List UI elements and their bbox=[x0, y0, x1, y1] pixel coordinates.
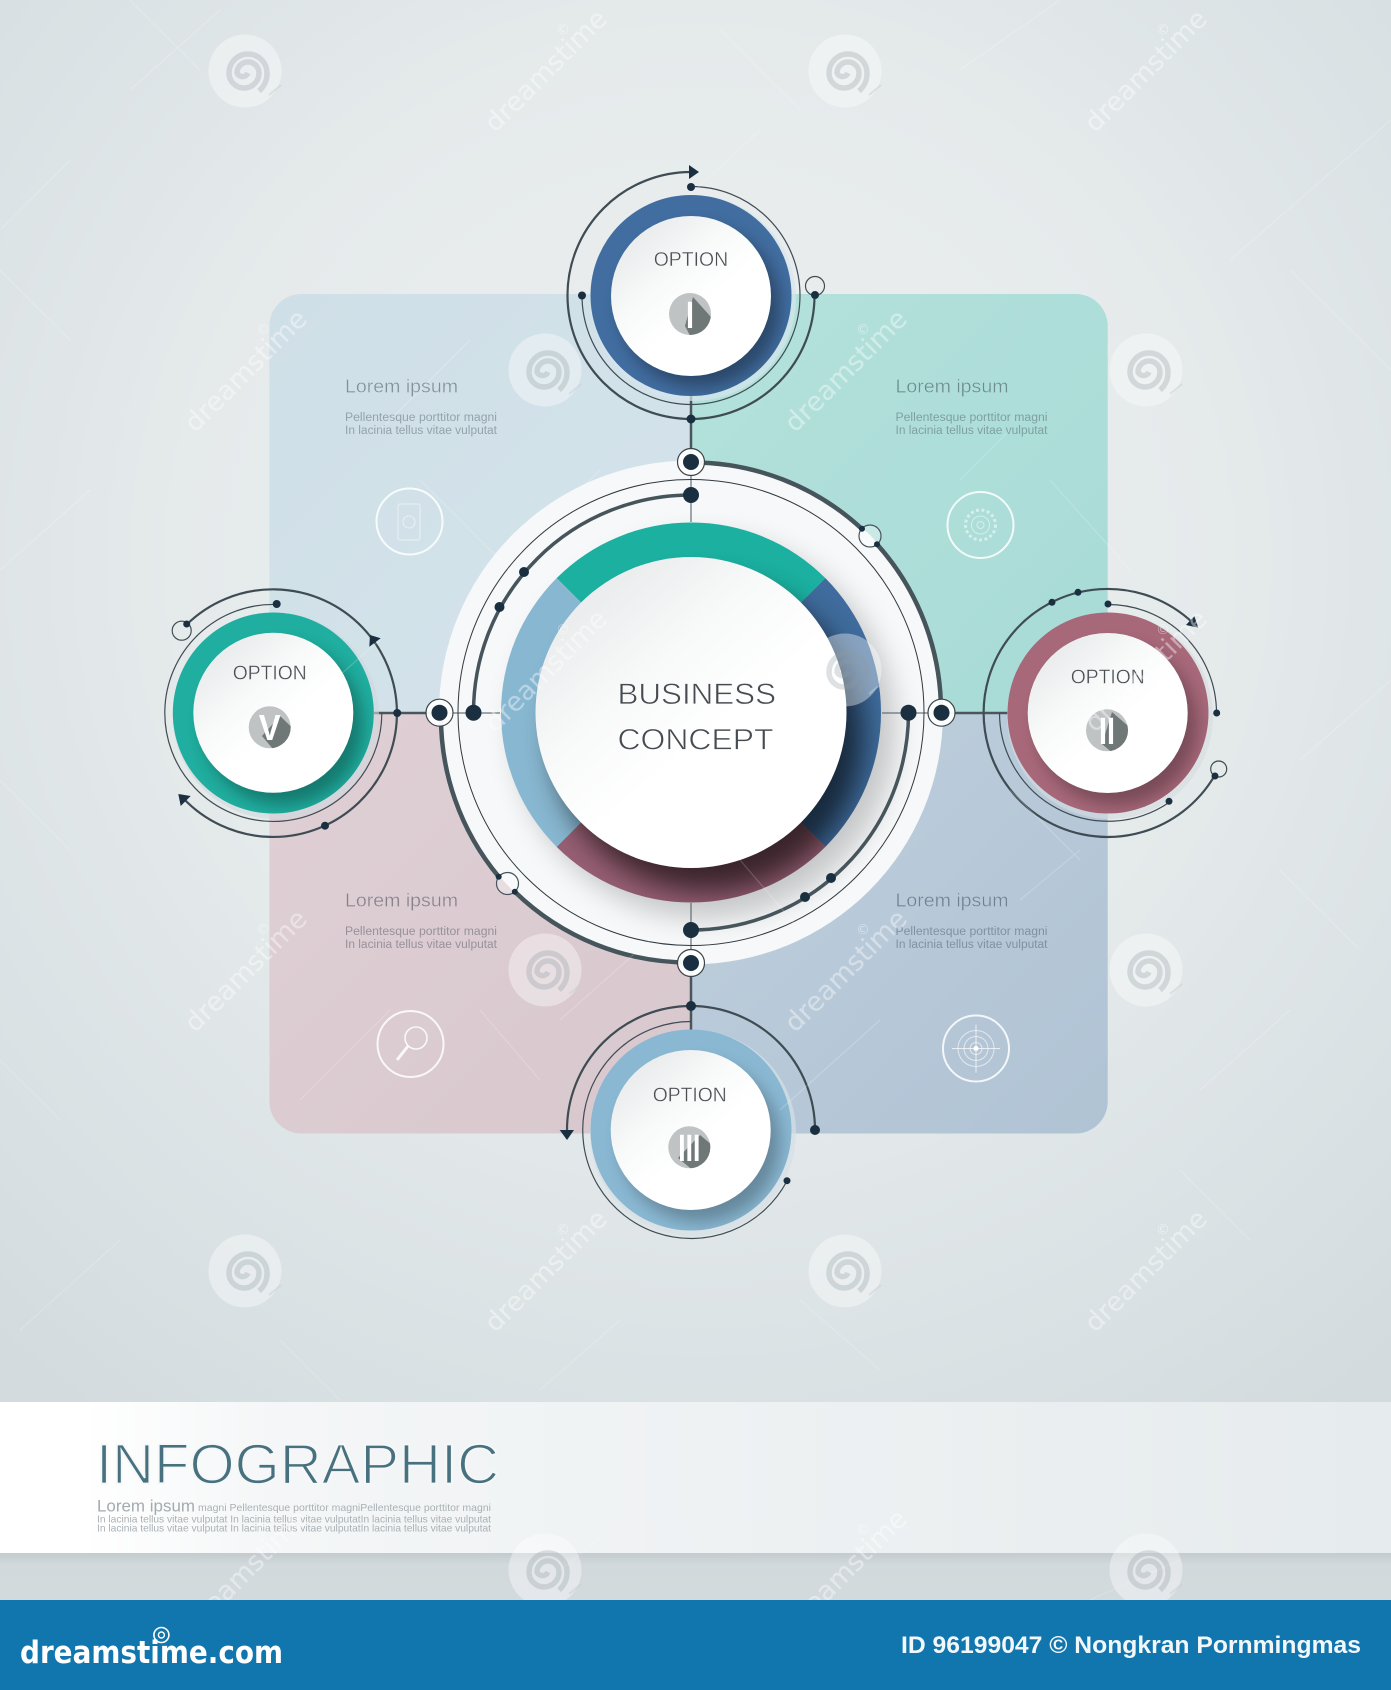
option: top (I) bbox=[568, 165, 824, 424]
icon: numeral II: II bbox=[1099, 711, 1115, 753]
text block: bottom right: Lorem ipsum bbox=[896, 890, 1008, 910]
watermark: dreamstime text: dreamstime bbox=[1078, 603, 1214, 739]
panel: top right bbox=[691, 294, 1108, 713]
watermark: dreamstime text: © bbox=[1156, 622, 1170, 638]
panel: bottom right bbox=[691, 713, 1108, 1134]
option: bottom (III) bbox=[560, 1001, 820, 1238]
icon: smartphone bbox=[376, 488, 442, 554]
hub junction nodes bbox=[426, 448, 955, 976]
watermark: dreamstime text: © bbox=[556, 622, 570, 638]
circuit arcs around hub bbox=[441, 462, 941, 963]
arrow bbox=[1186, 616, 1198, 628]
footer bar bbox=[0, 1600, 1391, 1690]
text block: bottom right bbox=[896, 890, 1048, 951]
watermark: dreamstime text: © bbox=[256, 1522, 270, 1538]
segmented ring bbox=[501, 523, 881, 902]
option: left (V): OPTION bbox=[233, 661, 307, 684]
title strip bbox=[0, 1402, 1391, 1553]
panel: bottom left bbox=[269, 713, 691, 1134]
arrow bbox=[560, 1130, 574, 1140]
text block: bottom right: Pellentesque porttitor magni bbox=[896, 926, 1048, 938]
open node bottom left bbox=[496, 872, 518, 894]
text block: top right: In lacinia tellus vitae vulputat bbox=[896, 425, 1048, 437]
watermark: dreamstime text: dreamstime bbox=[1078, 1203, 1214, 1339]
icon: numeral I bbox=[669, 293, 711, 335]
text block: top left: Pellentesque porttitor magni bbox=[345, 412, 497, 424]
panel: top left bbox=[269, 294, 691, 713]
open node top right bbox=[859, 525, 881, 547]
option: bottom (III): OPTION bbox=[653, 1084, 727, 1107]
icon: numeral III: III bbox=[678, 1128, 700, 1170]
watermark: dreamstime text: © bbox=[556, 1222, 570, 1238]
text block: top right: Lorem ipsum bbox=[896, 376, 1008, 396]
watermark: dreamstime text: dreamstime bbox=[778, 1503, 914, 1639]
arrow bbox=[689, 165, 699, 179]
text block: bottom left: Pellentesque porttitor magni bbox=[345, 926, 497, 938]
text block: top left: Lorem ipsum bbox=[345, 376, 458, 396]
option arcs bbox=[165, 589, 397, 837]
watermark: dreamstime text: © bbox=[856, 322, 870, 338]
icon: target bbox=[943, 1016, 1009, 1082]
icon: numeral II bbox=[1086, 709, 1128, 752]
text block: top left bbox=[345, 376, 498, 437]
option: top (I): OPTION bbox=[654, 248, 728, 271]
icon: gear bbox=[948, 492, 1014, 558]
watermark: spirals bbox=[208, 34, 1182, 1606]
watermark: dreamstime text: © bbox=[856, 1522, 870, 1538]
watermark: dreamstime text: dreamstime bbox=[178, 303, 314, 439]
watermark: dreamstime text: © bbox=[1156, 22, 1170, 38]
footer credit: ID 96199047 © Nongkran Pornmingmas bbox=[901, 1632, 1361, 1659]
white backing disc bbox=[439, 460, 943, 964]
grey band below the title strip bbox=[0, 1553, 1391, 1600]
watermark: dreamstime text bbox=[178, 3, 1214, 1639]
icon: numeral V: V bbox=[259, 707, 281, 748]
text block: top left: In lacinia tellus vitae vulputat bbox=[345, 425, 498, 437]
centre disc with title bbox=[536, 557, 846, 868]
panel: four coloured quadrants bbox=[269, 294, 1108, 1134]
central hub bbox=[439, 460, 943, 964]
watermark: dreamstime text: © bbox=[856, 922, 870, 938]
watermark: dreamstime text: dreamstime bbox=[778, 303, 914, 439]
watermark: dreamstime text: dreamstime bbox=[1078, 3, 1214, 139]
icon: numeral V bbox=[248, 706, 291, 748]
option: left (V) bbox=[165, 589, 401, 837]
watermark: dreamstime text: © bbox=[256, 322, 270, 338]
text block: top right: Pellentesque porttitor magni bbox=[896, 412, 1048, 424]
footer logo: dreamstime.com bbox=[20, 1635, 283, 1671]
watermark: dreamstime text: dreamstime bbox=[478, 3, 614, 139]
icon: magnifier bbox=[378, 1011, 444, 1077]
subtitle text: Lorem ipsum bbox=[97, 1496, 195, 1516]
option arcs bbox=[567, 1006, 815, 1238]
text block: bottom right: In lacinia tellus vitae vulputat bbox=[896, 939, 1048, 951]
option: right (II): OPTION bbox=[1071, 665, 1145, 688]
text block: bottom left: Lorem ipsum bbox=[345, 890, 458, 910]
watermark: diagonal lattice bbox=[300, 186, 1108, 1556]
subtitle text: In lacinia tellus vitae vulputat In lacinia tellus vitae vulputatIn lacinia tellus vitae vulputat bbox=[97, 1522, 491, 1534]
icon: numeral III bbox=[668, 1126, 710, 1168]
watermark: dreamstime text: © bbox=[256, 922, 270, 938]
text block: bottom left: In lacinia tellus vitae vulputat bbox=[345, 939, 498, 951]
title: INFOGRAPHIC bbox=[96, 1432, 499, 1496]
watermark: dreamstime text: dreamstime bbox=[478, 603, 614, 739]
centre disc with title: CONCEPT bbox=[618, 723, 774, 756]
option arcs bbox=[568, 172, 824, 419]
option arcs bbox=[984, 589, 1227, 837]
connector lines bbox=[374, 396, 1008, 1030]
subtitle text bbox=[97, 1496, 491, 1534]
watermark: dreamstime text: © bbox=[556, 22, 570, 38]
watermark: dreamstime text: dreamstime bbox=[478, 1203, 614, 1339]
subtitle text: In lacinia tellus vitae vulputat In lacinia tellus vitae vulputatIn lacinia tellus vitae vulputat bbox=[97, 1513, 491, 1525]
arrows bbox=[178, 635, 381, 806]
icon: numeral I: I bbox=[686, 295, 694, 337]
watermark: dreamstime text: dreamstime bbox=[178, 1503, 314, 1639]
subtitle text: magni Pellentesque porttitor magniPellentesque porttitor magni bbox=[198, 1502, 491, 1514]
centre disc with title: BUSINESS bbox=[618, 678, 776, 711]
text block: bottom left bbox=[345, 890, 498, 951]
option: right (II) bbox=[984, 589, 1227, 837]
watermark: dreamstime text: © bbox=[1156, 1222, 1170, 1238]
watermark: dreamstime text: dreamstime bbox=[778, 903, 914, 1039]
watermark: dreamstime text: dreamstime bbox=[178, 903, 314, 1039]
text block: top right bbox=[896, 376, 1048, 437]
soft shadow of the ring bbox=[515, 538, 895, 918]
